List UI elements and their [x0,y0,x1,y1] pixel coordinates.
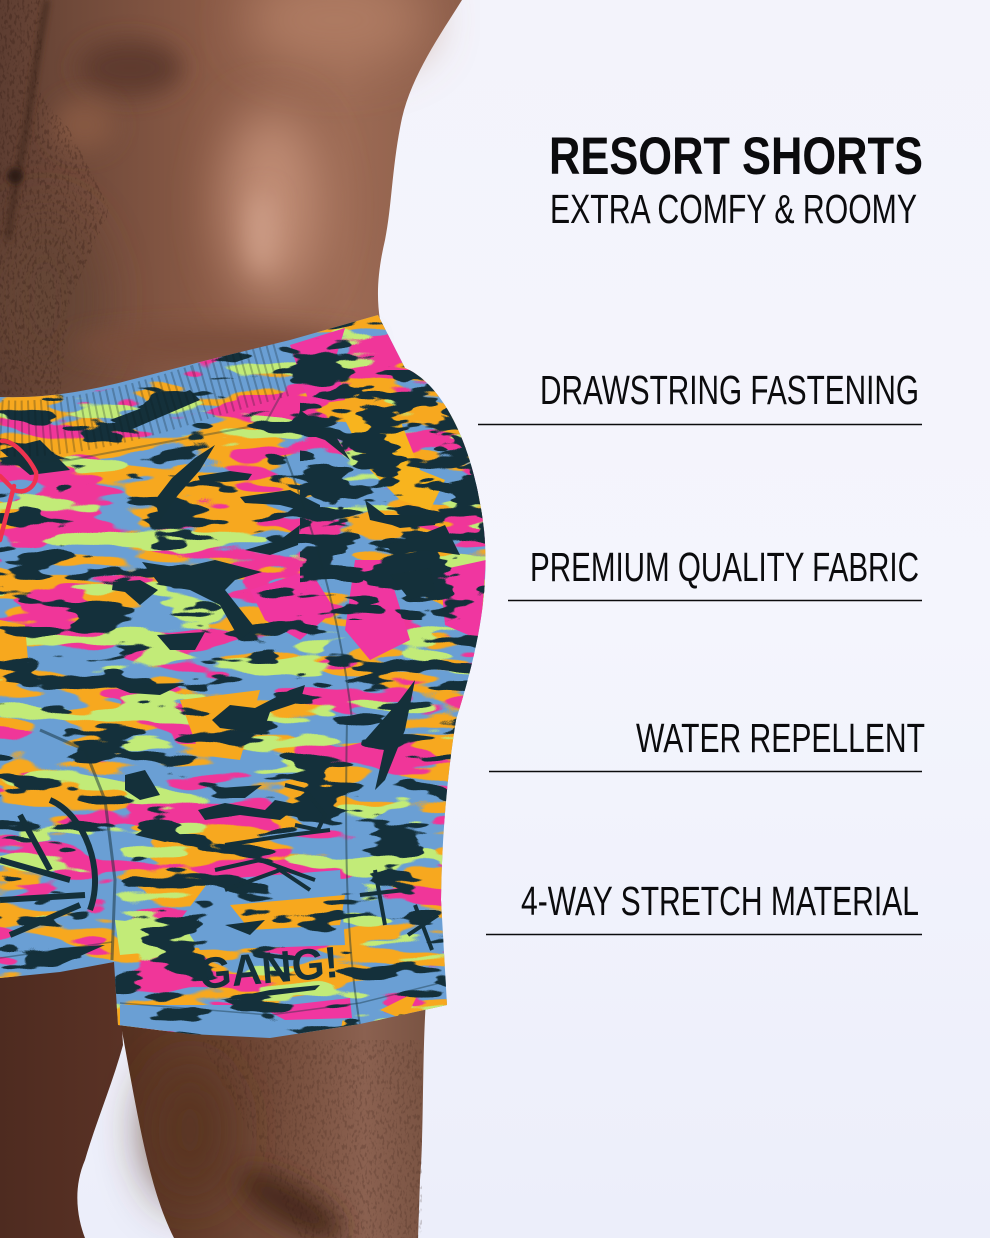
leg hair [200,1040,422,1238]
hem stitch [0,942,444,1015]
camo fabric [0,310,490,1040]
dense dark upper-right print [300,370,490,620]
drawstring [0,441,36,540]
body hair [0,0,110,395]
abdominal groove [8,0,47,240]
flower outline print [215,785,438,950]
crotch fold [40,730,115,960]
navel [7,168,23,184]
waistband pleats [0,368,285,429]
dark print marks [0,390,460,1000]
model legs [0,960,426,1238]
waistband stitch [0,393,282,465]
model torso [0,0,462,402]
regional colour patches [0,328,486,1035]
pocket and side seams [285,455,360,1025]
resort shorts [0,310,490,1040]
left leg sunburst print [0,800,95,935]
print lettering: GANG! [197,938,340,999]
